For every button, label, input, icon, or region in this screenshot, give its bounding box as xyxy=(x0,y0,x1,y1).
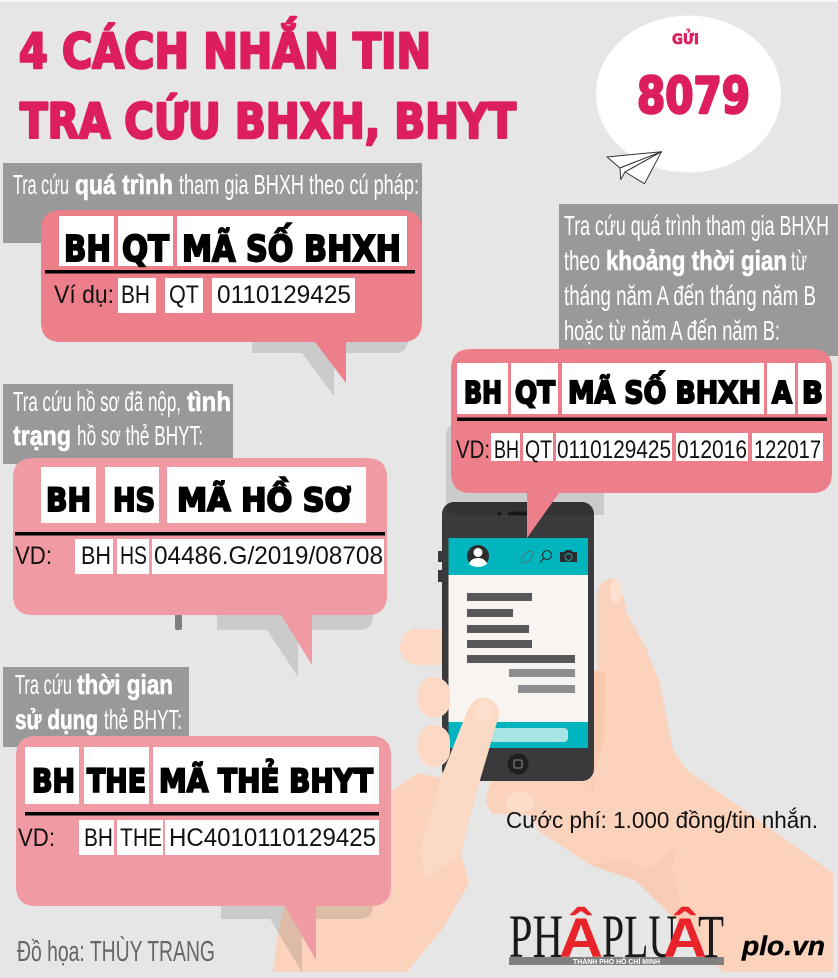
instruction box: quá trình xyxy=(75,169,173,200)
instruction box xyxy=(3,384,233,464)
example: 04486.G/2019/08708 xyxy=(154,542,383,570)
example: 0110129425 xyxy=(217,281,351,309)
instruction box: trạng xyxy=(13,420,71,451)
instruction box xyxy=(559,204,838,356)
title: TRA CỨU BHXH, BHYT xyxy=(20,93,516,150)
example: HC4010110129425 xyxy=(169,824,376,852)
instruction box: thẻ BHYT: xyxy=(104,704,182,735)
example: VD: xyxy=(456,436,490,464)
syntax: BH THE MÃ THẺ BHYT: MÃ THẺ BHYT xyxy=(159,759,373,800)
logo: Pháp Luật: Â xyxy=(559,906,603,969)
site name: plo.vn xyxy=(741,931,825,961)
example: QT xyxy=(169,281,199,309)
panel: query by time range xyxy=(446,204,838,538)
example: 012016 xyxy=(677,436,747,464)
syntax: BH QT MÃ SỐ BHXH A B: A xyxy=(772,376,793,411)
illustration: hand in front of phone xyxy=(273,677,499,972)
instruction box: theo xyxy=(564,245,600,276)
icon: smartphone xyxy=(438,502,594,781)
logo: Pháp Luật: PLU xyxy=(602,904,677,971)
bubble shadow xyxy=(217,600,373,677)
instruction box xyxy=(3,667,189,747)
example xyxy=(15,539,384,574)
speech bubble xyxy=(13,458,387,665)
syntax: BH QT MÃ SỐ BHXH A B xyxy=(457,363,827,421)
small stem xyxy=(175,612,182,630)
credit: Đồ họa: THÙY TRANG xyxy=(17,935,215,968)
fee note: Cước phí: 1.000 đồng/tin nhắn. xyxy=(506,807,818,833)
example xyxy=(54,278,355,313)
bubble shadow xyxy=(252,330,408,396)
send to 8079 bubble: GỬI xyxy=(672,29,699,48)
message lines xyxy=(467,593,575,693)
example: QT xyxy=(525,436,552,464)
logo: Pháp Luật: T xyxy=(698,904,724,971)
title xyxy=(19,17,516,150)
example: 0110129425 xyxy=(557,436,671,464)
logo: Pháp Luật: Â xyxy=(663,906,707,969)
syntax: BH QT MÃ SỐ BHXH xyxy=(45,216,415,274)
send to 8079 bubble: 8079 xyxy=(637,67,750,125)
syntax: BH QT MÃ SỐ BHXH A B: BH xyxy=(464,376,502,411)
logo: Pháp Luật: PH xyxy=(509,904,563,971)
title: 4 CÁCH NHẮN TIN xyxy=(19,17,431,80)
instruction box: tình xyxy=(187,386,231,417)
instruction box: khoảng thời gian xyxy=(606,245,787,276)
logo: Pháp Luật xyxy=(509,904,724,971)
syntax: BH HS MÃ HỒ SƠ: HS xyxy=(113,481,155,519)
icon: home button xyxy=(508,754,528,774)
icon: magnifier xyxy=(540,550,552,562)
syntax: BH QT MÃ SỐ BHXH: QT xyxy=(122,229,169,270)
icon: avatar xyxy=(467,545,489,567)
syntax: BH QT MÃ SỐ BHXH: MÃ SỐ BHXH xyxy=(182,223,401,270)
speech bubble xyxy=(451,349,832,538)
syntax: BH THE MÃ THẺ BHYT xyxy=(25,747,379,816)
example: Ví dụ: xyxy=(54,281,114,309)
example: BH xyxy=(84,824,113,852)
icon: camera xyxy=(560,550,577,562)
illustration: hand behind phone xyxy=(400,578,833,972)
instruction box: Tra cứu xyxy=(15,669,72,700)
panel: query by dossier status xyxy=(3,384,387,677)
speech bubble xyxy=(16,736,391,960)
example: BH xyxy=(81,542,111,570)
icon: paper plane xyxy=(607,152,662,184)
send to 8079 bubble xyxy=(596,16,781,172)
example: BH xyxy=(121,281,150,309)
syntax: BH QT MÃ SỐ BHXH: BH xyxy=(64,229,111,270)
syntax: BH HS MÃ HỒ SƠ: BH xyxy=(46,481,91,519)
instruction box: Tra cứu hồ sơ đã nộp, xyxy=(13,386,181,417)
icon: paper clip xyxy=(519,549,535,565)
example: 122017 xyxy=(754,436,821,464)
example xyxy=(18,820,379,855)
syntax: BH THE MÃ THẺ BHYT: THE xyxy=(87,762,146,800)
example: HS xyxy=(120,542,147,570)
syntax: BH THE MÃ THẺ BHYT: BH xyxy=(32,762,75,800)
example xyxy=(456,433,823,464)
bubble shadow xyxy=(221,890,373,972)
logo: Pháp Luật: THÀNH PHỐ HỒ CHÍ MINH xyxy=(573,956,660,966)
instruction box: từ xyxy=(791,245,807,276)
instruction box: tham gia BHXH theo cú pháp: xyxy=(179,169,419,200)
syntax: BH HS MÃ HỒ SƠ xyxy=(15,467,385,536)
speech bubble xyxy=(41,210,422,383)
syntax: BH QT MÃ SỐ BHXH A B: MÃ SỐ BHXH xyxy=(568,370,761,411)
syntax: BH QT MÃ SỐ BHXH A B: QT xyxy=(515,376,555,411)
example: VD: xyxy=(15,542,52,570)
syntax: BH QT MÃ SỐ BHXH A B: B xyxy=(802,376,823,411)
syntax: BH HS MÃ HỒ SƠ: MÃ HỒ SƠ xyxy=(177,476,351,519)
example: BH xyxy=(494,436,519,464)
panel: query by full history xyxy=(3,163,422,396)
instruction box: thời gian xyxy=(77,669,173,700)
bubble shadow xyxy=(446,423,604,515)
instruction box xyxy=(3,163,422,243)
instruction box: hồ sơ thẻ BHYT: xyxy=(77,420,203,451)
example: VD: xyxy=(18,824,55,852)
phone screen xyxy=(448,538,588,748)
instruction box: Tra cứu xyxy=(13,169,69,200)
instruction box: sử dụng xyxy=(15,704,98,735)
panel: query by card validity xyxy=(3,667,391,972)
example: THE xyxy=(120,824,162,852)
